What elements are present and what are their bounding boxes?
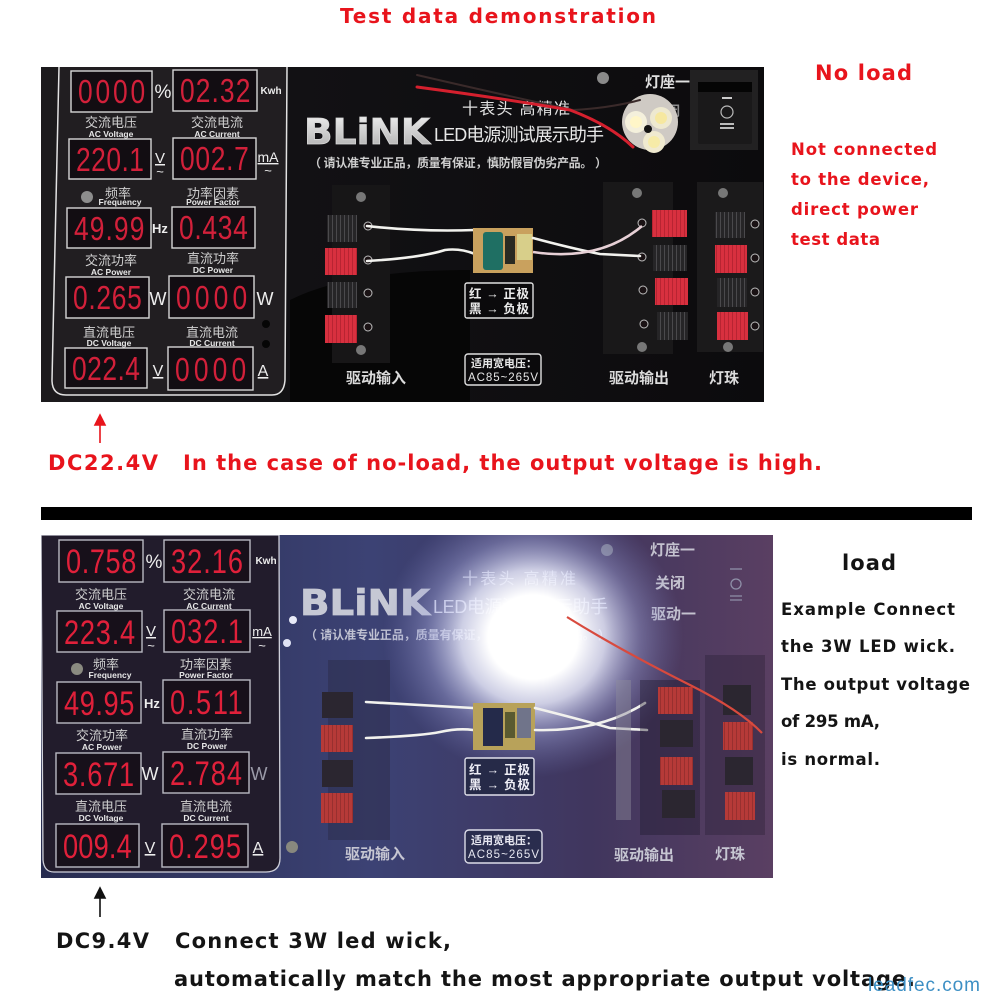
label: frequency: Frequency [88,670,132,680]
callout: load description: Example Connect [781,600,955,619]
label: DC current: 直流电流 [180,799,232,814]
meter: AC voltage: ~ [147,638,155,653]
screws and reflections [71,544,613,853]
meter: AC power: 0.265 [73,280,142,317]
meter: AC power: 3.671 [63,755,134,794]
meter: DC power: W [256,289,274,309]
brand logo: BLiNK [304,112,431,153]
label: DC voltage: DC Voltage [79,813,124,823]
callout: no load description: Not connected [791,140,937,159]
product subtitle: LED电源测试展示助手 [434,125,604,145]
caption: load result: automatically match the most appropriate output voltage. [174,967,915,991]
callout: no load description: direct power [791,200,919,219]
meter: energy: Kwh [255,556,277,567]
label: power factor: 功率因素 [187,186,239,201]
label: AC voltage: 交流电压 [85,115,137,130]
LED driver board [473,703,535,750]
callout: no load description [791,140,937,249]
meter: AC voltage: ~ [156,164,164,179]
voltage range note: AC85~265V [468,849,539,861]
label: DC power [187,251,239,275]
input terminal block [321,660,390,840]
arrow: red up to DC voltage [95,415,105,443]
meter: DC current: A [253,840,264,857]
meter: DC voltage: V [145,840,156,857]
meter: AC voltage: V [155,150,165,167]
meter: AC voltage: 220.1 [76,142,144,179]
meter: AC power [66,277,166,318]
meter: energy: 32.16 [171,542,243,581]
rocker switch [690,70,758,150]
meter: power factor: 0.511 [170,683,243,722]
callout: load description [781,600,970,769]
brand logo: BLiNK [300,583,431,624]
label: LED beads: 灯珠 [709,370,739,387]
callout: load description: is normal. [781,750,880,769]
voltage range note: AC85~265V [468,372,538,384]
voltage range note [465,354,541,385]
meter: DC power: 0000 [176,280,247,317]
caption: load result: DC9.4V [56,929,150,953]
meter: power percent: 0000 [78,74,145,111]
meter: frequency [67,208,168,248]
meter: AC power [56,753,158,794]
output wires [535,703,647,730]
label: power factor: Power Factor [186,197,241,207]
meter: AC current: 032.1 [171,612,243,651]
label: LED beads: 灯珠 [715,846,745,863]
callout: no load heading: No load [815,61,912,85]
switch off label, partly hidden: 闭 [666,103,680,119]
caption: no load result: In the case of no-load, the output voltage is high. [183,451,822,475]
meter: power percent [71,71,172,112]
meter: energy [164,540,277,582]
label: driver input: 驱动输入 [345,845,405,863]
meter: DC voltage: 022.4 [72,351,140,388]
output terminal block [616,680,700,835]
arrow: black up to DC voltage [95,888,105,917]
LED driver board [473,228,533,273]
meter: DC voltage: 009.4 [63,827,132,866]
meter: DC current: 0000 [175,352,246,389]
caption: load result: Connect 3W led wick, [175,929,451,953]
label: DC power [182,728,232,749]
meter: energy: 02.32 [180,73,250,110]
LED glare [394,535,674,768]
output terminal block [603,182,688,354]
label: AC current [184,588,234,609]
meter: AC voltage: V [146,623,156,640]
label: DC voltage [75,799,127,823]
side labels: 关闭 [655,575,685,592]
side labels: 驱动一 [651,606,696,623]
label: DC voltage [83,325,135,348]
LED terminal block [697,182,763,352]
label: frequency: Frequency [98,197,142,207]
label: AC voltage: AC Voltage [79,601,124,611]
LED terminal block [705,655,765,835]
meter: AC voltage: 223.4 [64,613,135,652]
meter: DC power: W [250,764,268,784]
label: DC current: DC Current [183,813,229,823]
tagline: （ 请认准专业正品，质量有保证，慎防假冒伪劣产品。 ） [305,627,610,642]
meter: DC current [168,347,269,390]
meter: frequency: 49.95 [64,684,134,723]
callout: no load description: to the device, [791,170,929,189]
label: frequency: 频率 [93,657,119,672]
reflection and screws [81,72,609,402]
label: AC current: 交流电流 [191,115,243,130]
label: AC power [76,728,128,750]
callout: no load description: test data [791,230,880,249]
label: DC voltage: DC Voltage [87,338,132,348]
red LED wire [567,617,762,733]
voltage range note: 适用宽电压： [471,356,537,370]
LED module with three emitters [622,94,678,153]
label: DC power: DC Power [193,265,234,275]
heading: ten meters: 十表头 高精准 [462,570,576,588]
label: DC current: DC Current [189,338,235,348]
meter: power percent: % [146,552,163,573]
label: AC voltage: 交流电压 [75,587,127,602]
label: power factor: 功率因素 [180,657,232,672]
label: AC current: 交流电流 [183,587,235,602]
meter: AC current [164,610,272,653]
instrument sub-panel [41,535,280,872]
label: AC current: AC Current [194,129,240,139]
meter: DC voltage: V [153,363,164,380]
label: driver output: 驱动输出 [609,369,669,387]
label: AC power: AC Power [82,742,123,752]
callout: load heading: load [842,551,896,575]
side labels: 灯座一 [650,541,695,559]
label: frequency: 频率 [105,186,131,201]
label: DC voltage: 直流电压 [83,325,135,340]
label: AC current [191,115,243,139]
voltage range note: 适用宽电压： [471,833,537,847]
polarity note: 红 → 正极 [469,286,529,301]
caption: no load result: DC22.4V [48,451,159,475]
LED wires [417,75,640,147]
lamp base label: 灯座一 [645,73,690,91]
voltage range note [465,830,542,863]
label: DC current [186,325,238,348]
meter: energy: Kwh [260,86,282,97]
product subtitle: LED电源测试展示助手 [433,597,608,617]
input wires [366,702,473,738]
polarity note: 红 → 正极 [469,762,530,777]
meter: energy [173,70,282,111]
meter: AC voltage [57,611,156,653]
label: DC current [180,800,232,821]
meter: DC current: A [258,363,269,380]
side labels [650,541,696,623]
polarity note [465,758,534,795]
label: AC power: 交流功率 [85,253,137,268]
meter: AC voltage [69,139,165,179]
meter: DC voltage [56,824,156,867]
label: AC voltage: AC Voltage [89,129,134,139]
label: power factor [180,658,233,678]
meter: DC power: 2.784 [170,754,242,793]
label: DC power: 直流功率 [187,251,239,266]
photo panel: loaded test bench [41,497,773,878]
watermark: leadfec.com [868,975,980,996]
label: AC current: AC Current [186,601,232,611]
meter: DC current [162,824,264,867]
meter: AC current: ~ [264,163,272,178]
tagline: （ 请认准专业正品，质量有保证，慎防假冒伪劣产品。 ） [309,155,607,170]
heading: ten meters: 十表头 高精准 [462,100,570,118]
meter: AC current: mA [258,149,279,165]
label: AC voltage [75,587,127,611]
label: DC current: 直流电流 [186,325,238,340]
rocker switch glyphs [730,569,742,600]
label: AC power [85,253,137,277]
meter: AC current: 002.7 [180,141,249,178]
title: Test data demonstration [340,4,656,28]
label: DC power: DC Power [187,741,228,751]
meter: AC current: ~ [258,638,266,653]
meter: power factor: 0.434 [179,210,248,247]
label: AC voltage [85,115,137,139]
meter: frequency [57,682,160,723]
meter: DC power [163,752,268,793]
label: AC power: 交流功率 [76,728,128,743]
polarity note: 黑 → 负极 [469,777,530,792]
photo panel: no load test bench [41,67,764,402]
meter: DC voltage [65,348,164,388]
caption: load result [56,929,915,991]
meter: power percent: % [155,82,172,103]
meter: power percent: 0.758 [66,542,136,581]
label: driver input: 驱动输入 [346,369,406,387]
polarity note: 黑 → 负极 [469,301,529,316]
label: driver output: 驱动输出 [614,846,674,864]
section divider [41,507,972,520]
meter: DC current: 0.295 [169,827,241,866]
label: frequency [98,186,142,207]
callout: load description: The output voltage [781,675,970,694]
meter: AC power: W [142,764,158,784]
meter: AC power: W [150,289,166,309]
meter: power percent [59,540,163,582]
label: AC power: AC Power [91,267,132,277]
input wires [367,226,475,261]
callout: load description: of 295 mA, [781,712,880,731]
meter: frequency: 49.99 [74,211,144,248]
output wires [533,226,642,256]
meter: AC current: mA [252,624,272,639]
meter: AC current [173,138,279,179]
label: frequency [88,657,132,680]
label: power factor [186,186,241,207]
label: power factor: Power Factor [179,670,234,680]
meter: frequency: Hz [152,221,168,236]
polarity note [465,283,533,318]
instrument sub-panel [52,67,287,395]
input terminal block [325,185,390,363]
callout: load description: the 3W LED wick. [781,637,955,656]
meter: frequency: Hz [144,696,160,711]
label: DC voltage: 直流电压 [75,799,127,814]
label: DC power: 直流功率 [181,727,233,742]
meter: DC power [169,276,274,318]
